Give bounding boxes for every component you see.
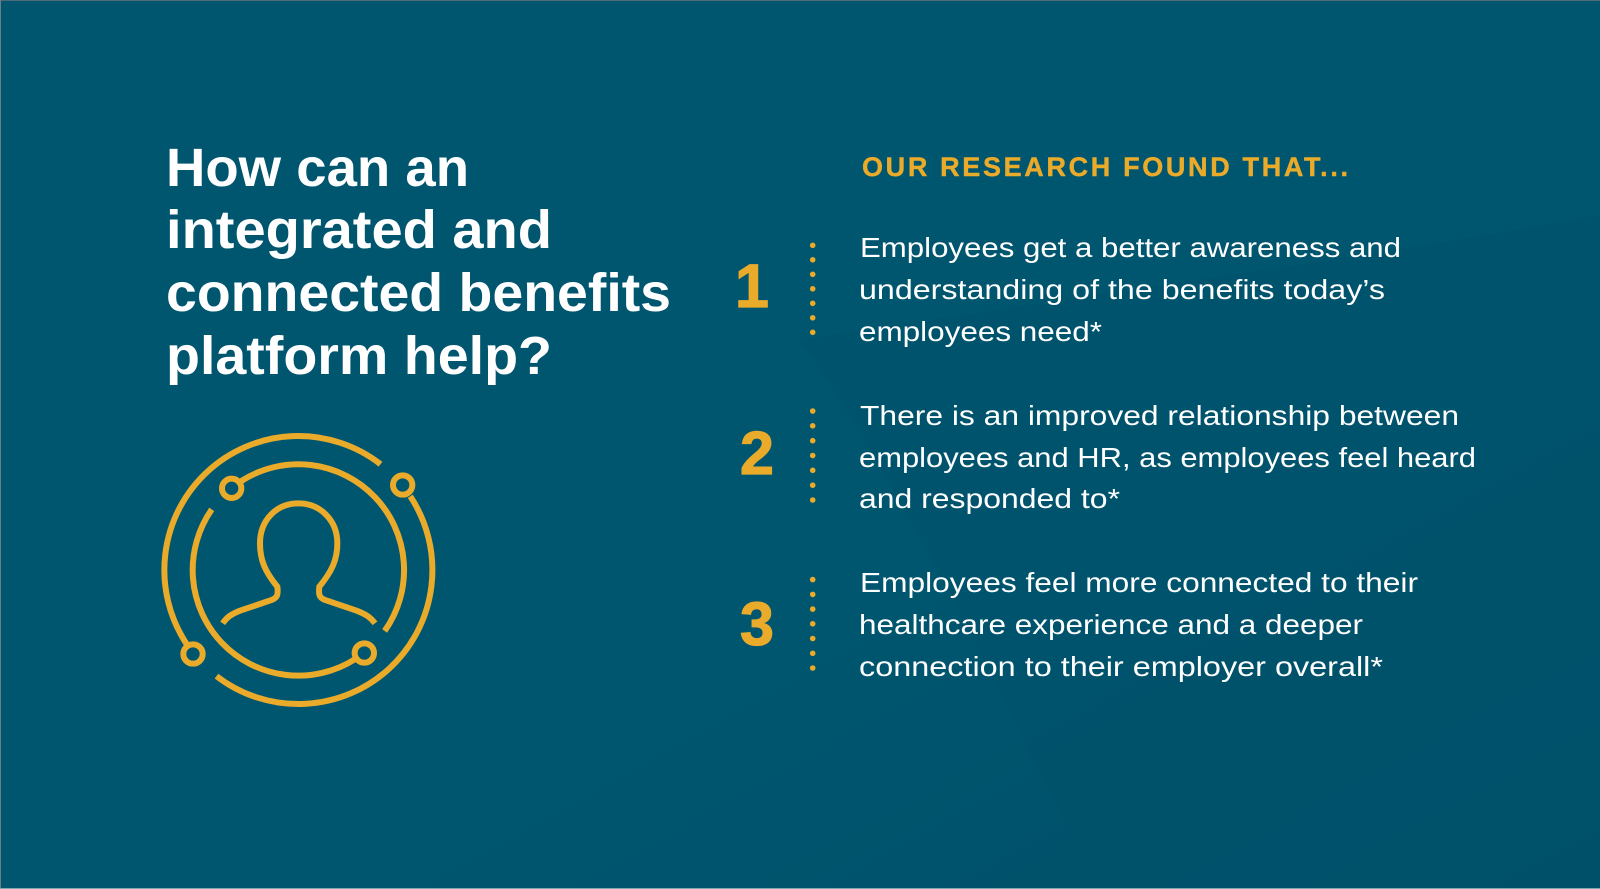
finding 3 text	[859, 567, 1418, 682]
finding 1	[735, 232, 1401, 347]
finding 1 text: employees need*	[859, 316, 1102, 347]
finding 2	[740, 400, 1476, 514]
dotted divider 3	[810, 577, 816, 671]
finding 1 text: understanding of the benefits today’s	[859, 274, 1385, 305]
finding 2 text: and responded to*	[859, 483, 1120, 514]
finding 3 text: connection to their employer overall*	[859, 651, 1383, 682]
finding 3	[740, 567, 1418, 682]
number 2: 2	[740, 419, 774, 487]
finding 1 text: Employees get a better awareness and	[860, 232, 1401, 263]
finding 2 text: employees and HR, as employees feel heard	[859, 442, 1476, 473]
finding 3 text: healthcare experience and a deeper	[859, 609, 1363, 640]
number 1: 1	[735, 252, 769, 320]
title: How can an	[166, 138, 469, 198]
heading: our research found that: OUR RESEARCH FOUND THAT...	[862, 152, 1348, 182]
finding 1 text	[859, 232, 1401, 347]
title: platform help?	[166, 326, 552, 386]
number 3: 3	[740, 590, 774, 658]
finding 3 text: Employees feel more connected to their	[860, 567, 1418, 598]
dotted divider 1	[810, 242, 816, 335]
icon: person in connected circles	[164, 436, 432, 704]
finding 2 text: There is an improved relationship between	[860, 400, 1459, 431]
title: connected benefits	[166, 263, 671, 323]
finding 2 text	[859, 400, 1476, 514]
dotted divider 2	[810, 408, 816, 503]
title: integrated and	[166, 200, 552, 260]
title	[166, 138, 671, 386]
